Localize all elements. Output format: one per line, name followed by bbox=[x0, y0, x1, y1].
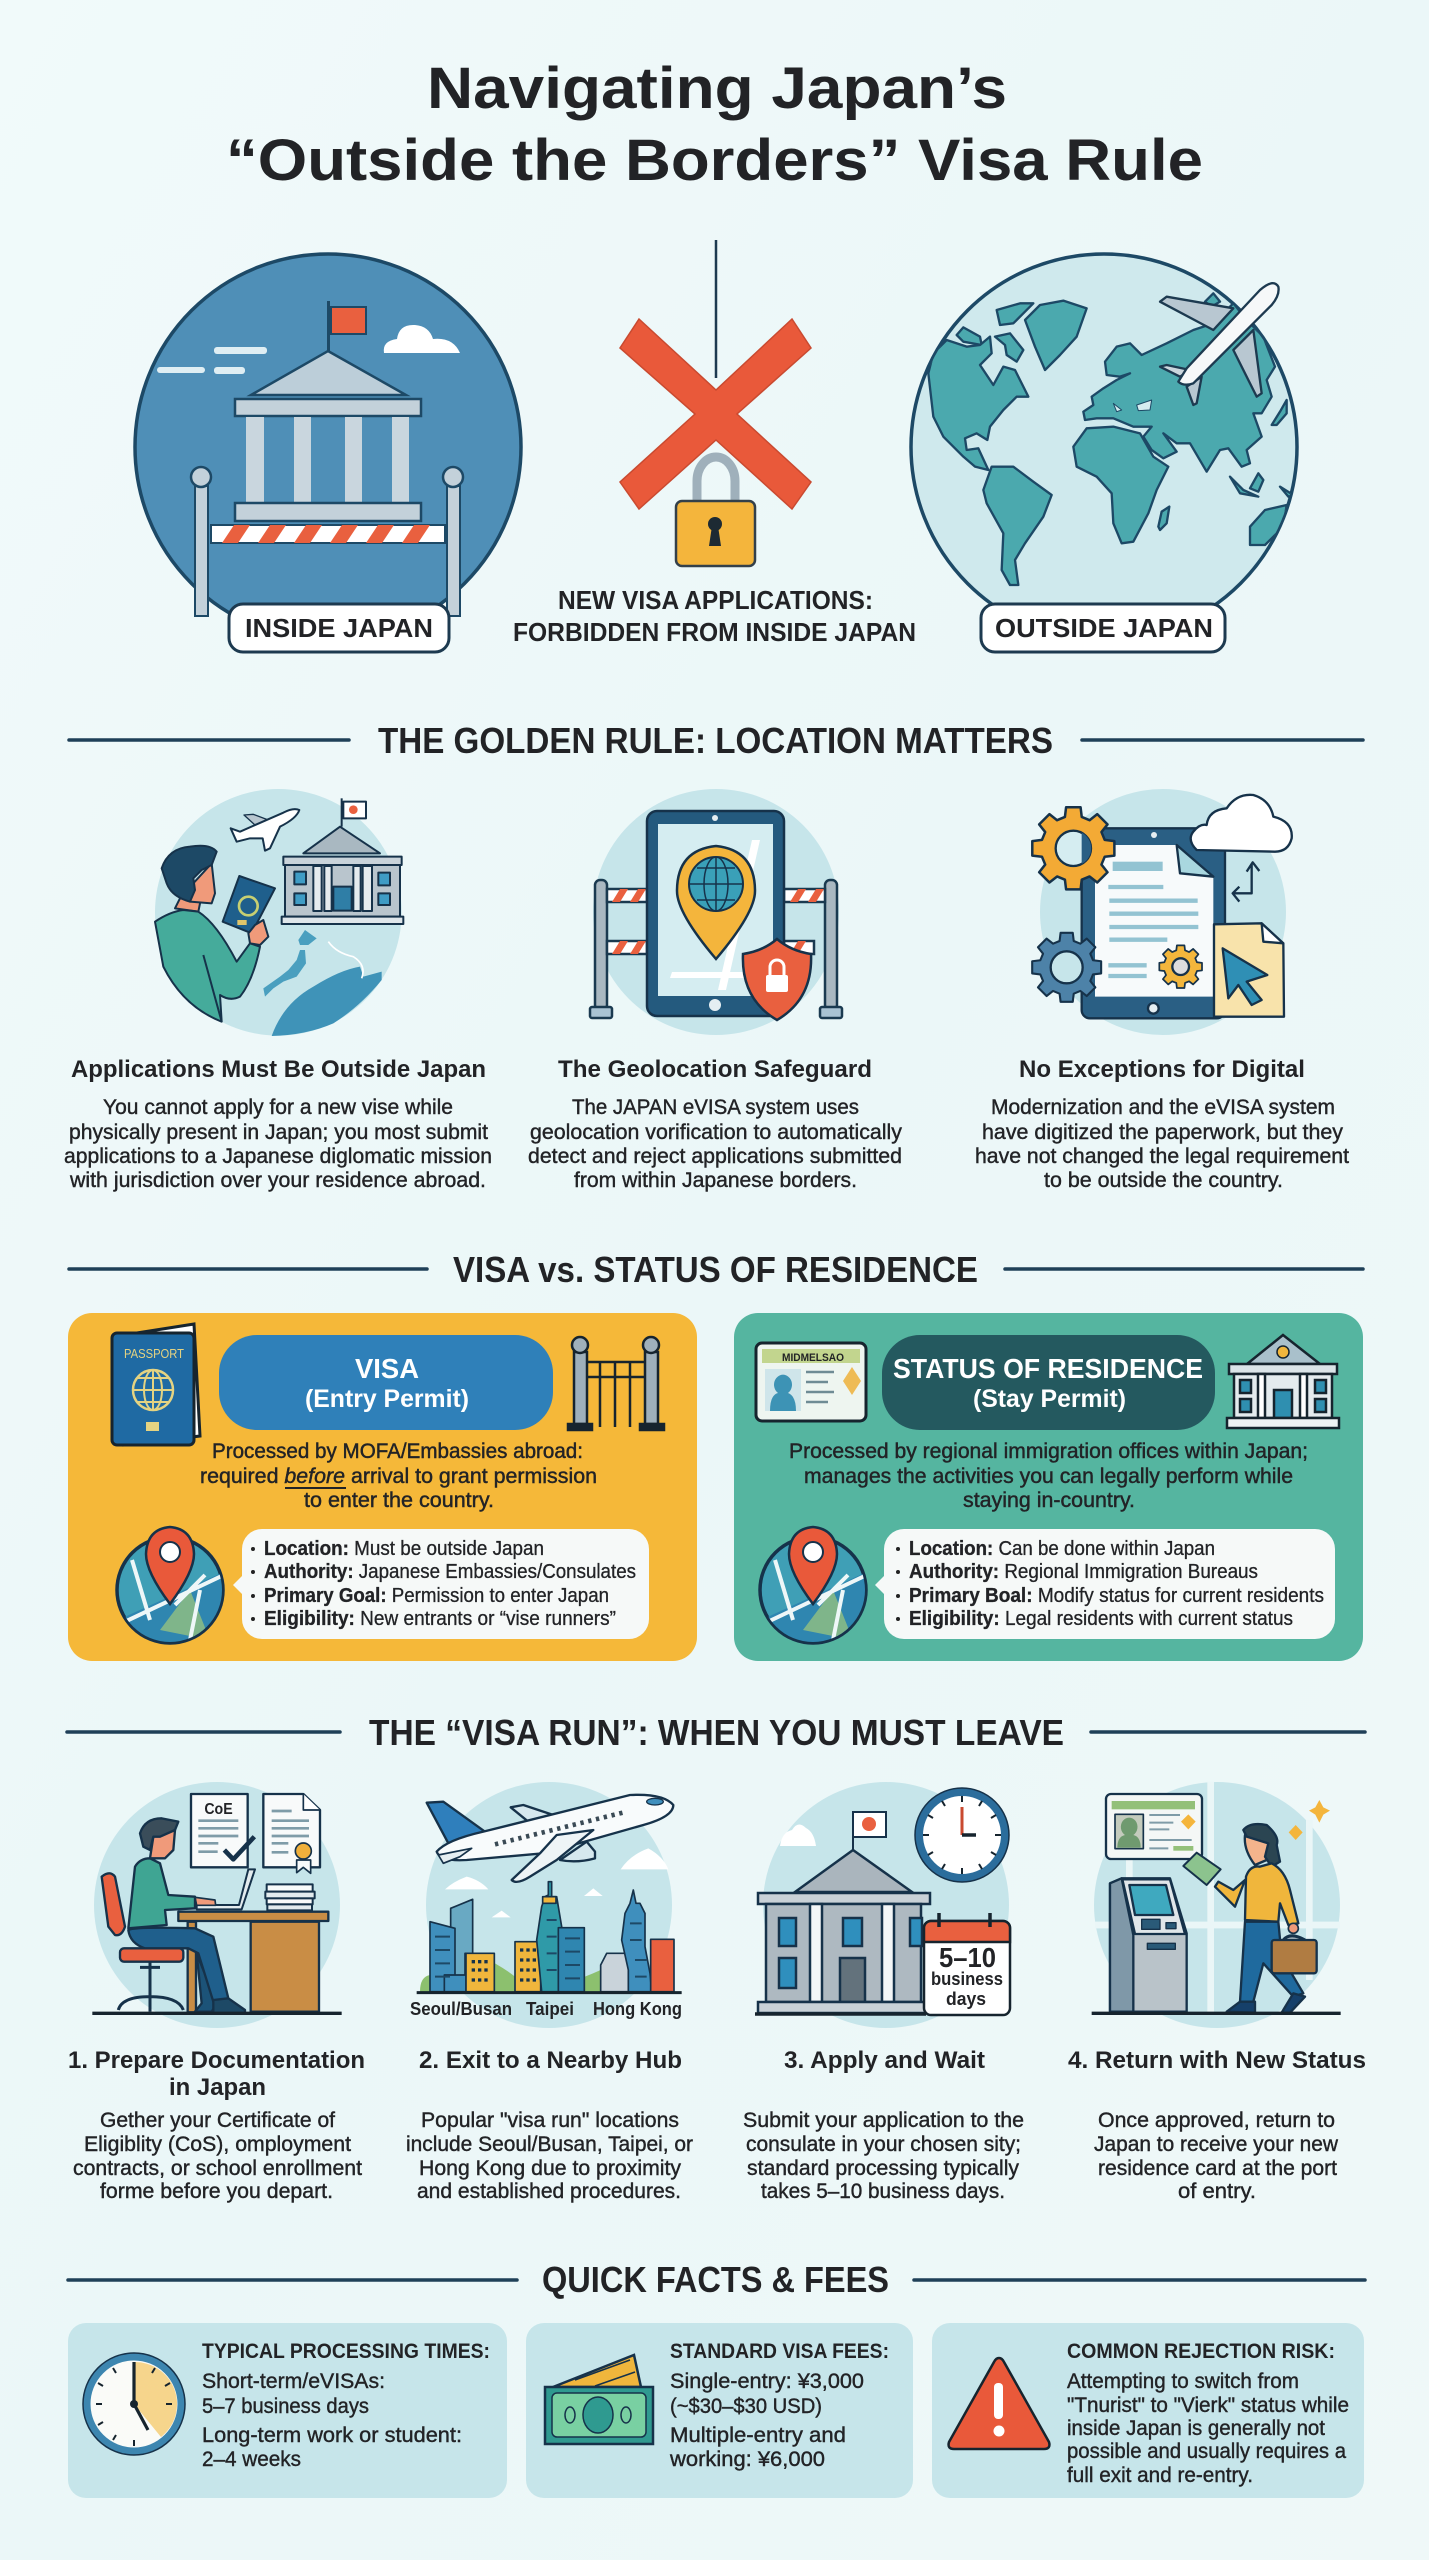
text: no exceptions for digital: to be outside the country. bbox=[1044, 1169, 1283, 1192]
text: geolocation safeguard: The JAPAN eVISA system uses bbox=[572, 1096, 859, 1119]
text: step 4: Once approved, return to bbox=[1098, 2109, 1335, 2132]
text: geolocation safeguard: The Geolocation Safeguard bbox=[558, 1056, 872, 1083]
section heading: golden rule: THE GOLDEN RULE: LOCATION MATTERS bbox=[378, 720, 1053, 761]
arrows bbox=[1233, 862, 1259, 902]
text: geolocation safeguard bbox=[528, 1056, 903, 1192]
body bbox=[175, 895, 202, 912]
text: step 1: Eligiblity (CoS), omployment bbox=[84, 2133, 351, 2156]
documents bbox=[191, 1794, 320, 1873]
icon: clock bbox=[83, 2353, 185, 2455]
text: visa fees: Single-entry: ¥3,000 bbox=[670, 2370, 864, 2393]
callout: visa facts: Eligibility: New entrants or “vise runners” bbox=[264, 1608, 616, 1630]
text: step 3: takes 5–10 business days. bbox=[761, 2180, 1005, 2203]
text: step 1: 1. Prepare Documentation bbox=[68, 2047, 365, 2074]
text: applications must be outside Japan: physically present in Japan; you most submit bbox=[69, 1121, 488, 1144]
text: no exceptions for digital: have digitized the paperwork, but they bbox=[982, 1121, 1344, 1144]
text: step 2 bbox=[406, 2047, 693, 2203]
caption: forbidden: FORBIDDEN FROM INSIDE JAPAN bbox=[513, 617, 916, 647]
title bbox=[226, 56, 1203, 193]
text: visa fees: STANDARD VISA FEES: bbox=[670, 2340, 889, 2363]
head bbox=[190, 863, 215, 903]
text: step 1: Gether your Certificate of bbox=[100, 2109, 335, 2132]
icon: flag bbox=[327, 301, 366, 351]
text: status description: manages the activities you can legally perform while bbox=[804, 1465, 1293, 1488]
text: rejection risk: full exit and re-entry. bbox=[1067, 2464, 1253, 2487]
icon: residence card: MIDMELSAO bbox=[782, 1352, 844, 1364]
text: visa fees bbox=[669, 2340, 889, 2471]
ground bbox=[1092, 2008, 1341, 2018]
callout: visa facts: Location: Must be outside Japan bbox=[264, 1538, 544, 1560]
clouds bbox=[445, 1848, 668, 1917]
barrier posts bbox=[590, 880, 842, 1018]
tablet bbox=[1082, 828, 1225, 1018]
text: no exceptions for digital: have not changed the legal requirement bbox=[975, 1145, 1349, 1168]
text: step 3: 3. Apply and Wait bbox=[784, 2047, 985, 2074]
pill: status of residence bbox=[882, 1335, 1215, 1430]
continents bbox=[928, 293, 1293, 585]
icon: inside Japan circle with government building bbox=[135, 254, 521, 640]
icon: immigration building bbox=[1227, 1335, 1339, 1428]
icon: plane bbox=[1160, 283, 1279, 405]
label: outside Japan: OUTSIDE JAPAN bbox=[995, 613, 1213, 643]
text: step 3 bbox=[743, 2047, 1024, 2203]
icon: outside Japan globe with plane bbox=[911, 254, 1297, 640]
text: rejection risk: COMMON REJECTION RISK: bbox=[1067, 2340, 1335, 2363]
ground bbox=[417, 1988, 682, 1997]
text: applications must be outside Japan bbox=[64, 1056, 492, 1192]
pill: visa: VISA bbox=[355, 1353, 419, 1384]
text: visa description: to enter the country. bbox=[304, 1489, 494, 1512]
clock bbox=[915, 1788, 1009, 1882]
text: no exceptions for digital: No Exceptions for Digital bbox=[1019, 1056, 1305, 1083]
text: processing times: TYPICAL PROCESSING TIMES: bbox=[202, 2340, 490, 2363]
icon: warning triangle bbox=[949, 2358, 1049, 2449]
person bbox=[195, 1953, 217, 2012]
gear yellow bbox=[1032, 807, 1114, 889]
consulate bbox=[758, 1850, 930, 2013]
icon: map pin bbox=[117, 1527, 228, 1650]
callout: visa facts: Primary Goal: Permission to enter Japan bbox=[264, 1585, 609, 1607]
text: applications must be outside Japan: You cannot apply for a new vise while bbox=[103, 1096, 453, 1119]
passport bbox=[223, 876, 275, 933]
text: status description: Processed by regional immigration offices within Japan; bbox=[789, 1440, 1308, 1463]
ground bbox=[92, 2008, 342, 2018]
callout: visa facts: Authority: Japanese Embassies/Consulates bbox=[264, 1561, 636, 1583]
city labels: Hong Kong bbox=[593, 1999, 682, 2019]
japan map and sea bbox=[263, 930, 382, 1036]
icon: step 2 plane over city skyline bbox=[410, 1782, 682, 2028]
shield bbox=[743, 939, 811, 1020]
callout: status facts: Primary Boal: Modify status for current residents bbox=[909, 1585, 1324, 1607]
icon: gate bbox=[568, 1337, 664, 1430]
pill: status of residence: (Stay Permit) bbox=[973, 1385, 1126, 1413]
text: no exceptions for digital: Modernization and the eVISA system bbox=[991, 1096, 1335, 1119]
pill: visa bbox=[219, 1335, 553, 1430]
text: visa description bbox=[200, 1440, 597, 1512]
icon: passport bbox=[112, 1324, 200, 1445]
panel: visa bbox=[68, 1313, 697, 1661]
text: status description: staying in-country. bbox=[963, 1489, 1135, 1512]
text: step 3: consulate in your chosen sity; bbox=[746, 2133, 1021, 2156]
caption: forbidden: NEW VISA APPLICATIONS: bbox=[558, 585, 873, 615]
panel: status of residence bbox=[734, 1313, 1363, 1661]
text: step 4: Japan to receive your new bbox=[1094, 2133, 1339, 2156]
callout: status facts: Authority: Regional Immigration Bureaus bbox=[909, 1561, 1258, 1583]
text: geolocation safeguard: from within Japanese borders. bbox=[574, 1169, 857, 1192]
text: step 2: and established procedures. bbox=[417, 2180, 681, 2203]
label: inside Japan: INSIDE JAPAN bbox=[245, 613, 433, 643]
cursor bbox=[1223, 948, 1267, 1005]
callout: status facts: Eligibility: Legal residents with current status bbox=[909, 1608, 1293, 1630]
embassy bbox=[282, 798, 403, 924]
icon: residence card bbox=[756, 1343, 866, 1421]
panel: processing times bbox=[68, 2323, 507, 2498]
text: step 2: 2. Exit to a Nearby Hub bbox=[419, 2047, 682, 2074]
icon: passport: PASSPORT bbox=[124, 1346, 184, 1361]
callout: visa facts bbox=[233, 1529, 649, 1639]
text: rejection risk: "Tnurist" to "Vierk" status while bbox=[1067, 2394, 1349, 2417]
label: inside Japan bbox=[229, 604, 449, 652]
flag bbox=[853, 1812, 886, 1852]
text: processing times: 5–7 business days bbox=[202, 2395, 369, 2418]
text: rejection risk bbox=[1067, 2340, 1349, 2487]
tablet bbox=[647, 811, 784, 1016]
label: outside Japan bbox=[981, 604, 1225, 652]
text: geolocation safeguard: geolocation vorification to automatically bbox=[530, 1121, 903, 1144]
icon: tablet with geolocation pin and shield bbox=[590, 789, 842, 1035]
text: step 4 bbox=[1068, 2047, 1366, 2203]
pin bbox=[677, 846, 755, 959]
panel: rejection risk bbox=[932, 2323, 1364, 2498]
chair bbox=[102, 1873, 125, 1935]
documents: CoE bbox=[204, 1801, 233, 1818]
icon: money bbox=[545, 2355, 653, 2444]
text: visa fees: Multiple-entry and bbox=[670, 2424, 846, 2447]
callout: status facts: Location: Can be done within Japan bbox=[909, 1538, 1215, 1560]
pill: visa: (Entry Permit) bbox=[305, 1385, 469, 1413]
gear small bbox=[1159, 945, 1202, 988]
text: visa description: required before arrival to grant permission bbox=[200, 1465, 597, 1488]
title: Navigating Japan’s bbox=[427, 56, 1007, 121]
text: step 1: in Japan bbox=[169, 2074, 266, 2101]
books bbox=[265, 1884, 315, 1910]
text: processing times: 2–4 weeks bbox=[202, 2448, 301, 2471]
skyline bbox=[420, 1882, 674, 1992]
gear blue bbox=[1032, 933, 1101, 1002]
text: applications must be outside Japan: applications to a Japanese diglomatic mission bbox=[64, 1145, 492, 1168]
icon: step 3 consulate, clock and calendar bbox=[755, 1782, 1010, 2028]
calendar: 5–10 bbox=[939, 1942, 996, 1973]
icon: step 1 person preparing documents bbox=[92, 1782, 342, 2028]
text: applications must be outside Japan: Applications Must Be Outside Japan bbox=[71, 1056, 486, 1083]
text: step 1: contracts, or school enrollment bbox=[73, 2157, 362, 2180]
text: step 1: forme before you depart. bbox=[100, 2180, 333, 2203]
text: step 3: Submit your application to the bbox=[743, 2109, 1024, 2132]
icon: forbidden X with padlock bbox=[620, 240, 811, 566]
text: processing times bbox=[202, 2340, 490, 2471]
text: visa fees: (~$30–$30 USD) bbox=[670, 2395, 822, 2418]
icon: map pin bbox=[760, 1527, 871, 1650]
city labels: Taipei bbox=[526, 1999, 574, 2019]
caption: forbidden bbox=[513, 585, 916, 647]
calendar bbox=[924, 1913, 1010, 2015]
text: visa description: Processed by MOFA/Embassies abroad: bbox=[212, 1440, 583, 1463]
text: applications must be outside Japan: with jurisdiction over your residence abroad. bbox=[69, 1169, 486, 1192]
icon: cloud bbox=[384, 325, 460, 353]
text: geolocation safeguard: detect and reject applications submitted bbox=[528, 1145, 902, 1168]
icon: step 4 return with residence card bbox=[1092, 1782, 1341, 2028]
text: processing times: Short-term/eVISAs: bbox=[202, 2370, 385, 2393]
text: status description bbox=[789, 1440, 1308, 1512]
city labels bbox=[410, 1999, 682, 2019]
plane bbox=[244, 814, 268, 825]
text: step 3: standard processing typically bbox=[747, 2157, 1020, 2180]
document bbox=[1095, 845, 1213, 997]
text: step 2: include Seoul/Busan, Taipei, or bbox=[406, 2133, 693, 2156]
text: step 2: Hong Kong due to proximity bbox=[419, 2157, 681, 2180]
pill: status of residence: STATUS OF RESIDENCE bbox=[893, 1353, 1203, 1384]
text: step 4: residence card at the port bbox=[1098, 2157, 1337, 2180]
laptop bbox=[197, 1869, 255, 1909]
text: processing times: Long-term work or student: bbox=[202, 2424, 462, 2447]
kiosk bbox=[1110, 1878, 1187, 2012]
text: step 4: of entry. bbox=[1178, 2180, 1256, 2203]
section heading: visa vs status: VISA vs. STATUS OF RESIDENCE bbox=[453, 1249, 978, 1290]
desk bbox=[188, 1922, 196, 2012]
icon: building bbox=[235, 351, 421, 521]
icon: person, passport and embassy bbox=[155, 789, 403, 1036]
section heading: visa run: THE “VISA RUN”: WHEN YOU MUST LEAVE bbox=[369, 1712, 1064, 1753]
text: step 2: Popular "visa run" locations bbox=[421, 2109, 679, 2132]
plane bbox=[427, 1802, 485, 1843]
text: rejection risk: Attempting to switch from bbox=[1067, 2370, 1299, 2393]
section heading: quick facts: QUICK FACTS & FEES bbox=[542, 2259, 889, 2300]
text: no exceptions for digital bbox=[975, 1056, 1349, 1192]
cloud bbox=[1191, 795, 1292, 852]
title: “Outside the Borders” Visa Rule bbox=[226, 128, 1203, 193]
panel: visa fees bbox=[526, 2323, 913, 2498]
calendar: business bbox=[931, 1969, 1003, 1989]
residence card bbox=[1106, 1794, 1202, 1859]
text: rejection risk: possible and usually requires a bbox=[1067, 2440, 1346, 2463]
icon: digital paperwork with gears and cloud bbox=[1032, 789, 1292, 1035]
icon: barrier bbox=[191, 467, 463, 616]
text: step 1 bbox=[68, 2047, 365, 2203]
calendar: days bbox=[946, 1989, 986, 2009]
callout: status facts bbox=[875, 1529, 1335, 1639]
folder bbox=[1214, 923, 1284, 1017]
text: step 4: 4. Return with New Status bbox=[1068, 2047, 1366, 2074]
person bbox=[1183, 1824, 1317, 2013]
icon: red X bbox=[620, 319, 811, 509]
icon: padlock shackle bbox=[697, 457, 735, 503]
text: rejection risk: inside Japan is generally not bbox=[1067, 2417, 1325, 2440]
icon: padlock body bbox=[676, 501, 755, 566]
city labels: Seoul/Busan bbox=[410, 1999, 512, 2019]
text: visa fees: working: ¥6,000 bbox=[669, 2448, 825, 2471]
sparkles bbox=[1181, 1800, 1330, 1840]
